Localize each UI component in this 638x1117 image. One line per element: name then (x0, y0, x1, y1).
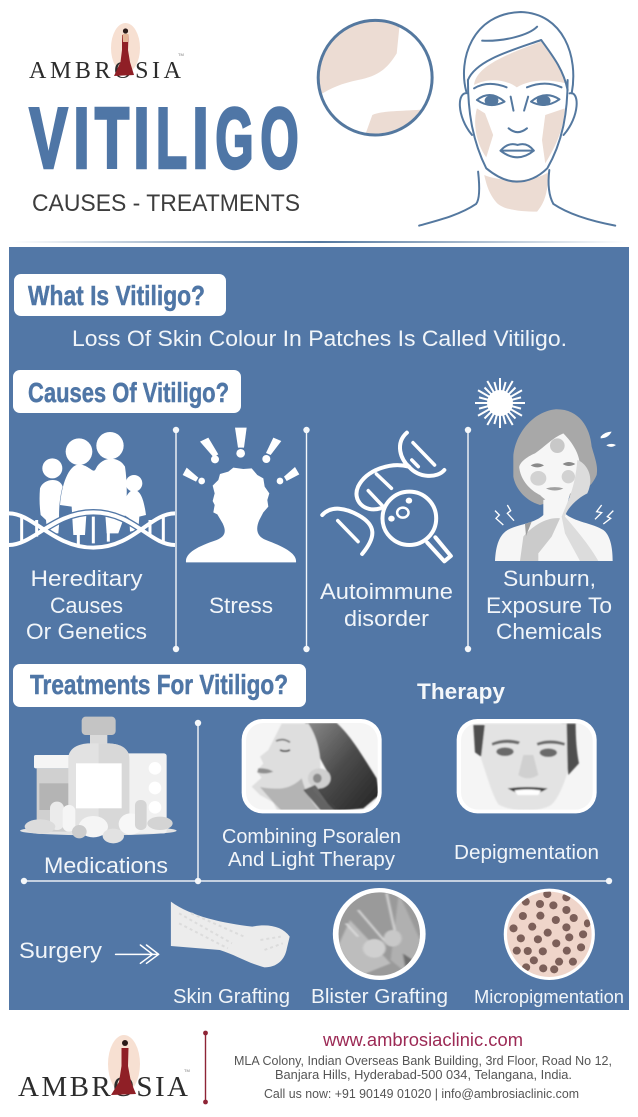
image: skin graft arm (171, 902, 290, 967)
main panel (9, 247, 629, 1010)
logo: Ambrosia footer: TM (184, 1068, 190, 1073)
heading: what is vitiligo (14, 274, 226, 316)
labels: causes (26, 566, 612, 644)
icon: stressed head (183, 428, 299, 562)
title: O (260, 92, 298, 186)
heading: causes: Causes Of Vitiligo? (28, 377, 229, 408)
labels: causes: disorder (344, 606, 429, 631)
labels: surgery options (173, 986, 624, 1008)
illustration: face with vitiligo patches (419, 12, 615, 226)
photo: depigmentation (457, 719, 597, 813)
subtitle: CAUSES - TREATMENTS (32, 190, 300, 217)
labels: causes: Sunburn, (503, 566, 596, 591)
cause dividers (173, 427, 471, 652)
label: medications: Medications (44, 853, 168, 878)
heading: causes (13, 370, 241, 413)
labels: causes: Exposure To (486, 593, 612, 618)
labels: causes: Hereditary (30, 566, 142, 591)
image: micropigmentation (504, 889, 595, 980)
logo: Ambrosia footer (18, 1035, 190, 1103)
icon: family and DNA (9, 432, 175, 548)
labels: causes: Chemicals (496, 619, 602, 644)
divider (12, 241, 627, 243)
title: I (74, 92, 90, 186)
labels: therapy options: Depigmentation (454, 842, 599, 864)
title: T (95, 92, 129, 186)
address and contact: Banjara Hills, Hyderabad-500 034, Telangana, India. (275, 1068, 572, 1082)
title: I (134, 92, 150, 186)
logo: Ambrosia header (29, 23, 184, 84)
title: G (216, 92, 254, 186)
labels: causes: Stress (209, 593, 273, 618)
labels: surgery options: Blister Grafting (311, 986, 448, 1008)
heading: treatments (13, 664, 306, 707)
logo: Ambrosia header: TM (178, 52, 184, 57)
labels: therapy options: Combining Psoralen (222, 826, 401, 848)
treatment dividers (21, 720, 612, 884)
address and contact: Call us now: +91 90149 01020 | info@ambrosiaclinic.com (264, 1087, 579, 1101)
labels: causes: Causes (50, 593, 123, 618)
address and contact (234, 1054, 612, 1101)
logo: Ambrosia header: AMBROSIA (29, 58, 182, 84)
heading: therapy: Therapy (417, 679, 506, 704)
labels: causes: Or Genetics (26, 619, 147, 644)
label: surgery: Surgery (19, 938, 102, 963)
heading: what is vitiligo: What Is Vitiligo? (28, 280, 205, 311)
arrow: surgery (116, 945, 159, 963)
illustration: skin close-up circle (316, 18, 434, 136)
icon: sun (475, 378, 525, 428)
labels: therapy options: And Light Therapy (228, 849, 395, 871)
labels: causes: Autoimmune (320, 579, 453, 604)
icon: sunburnt woman (495, 409, 616, 561)
footer divider (203, 1031, 208, 1104)
labels: surgery options: Micropigmentation (474, 987, 624, 1007)
icon: medications (20, 717, 177, 843)
title: L (156, 92, 187, 186)
definition text: Loss Of Skin Colour In Patches Is Called Vitiligo. (72, 326, 567, 351)
labels: therapy options (222, 826, 599, 871)
address and contact: MLA Colony, Indian Overseas Bank Building, 3rd Floor, Road No 12, (234, 1054, 612, 1068)
title: I (192, 92, 208, 186)
labels: surgery options: Skin Grafting (173, 986, 290, 1008)
image: blister grafting (333, 888, 426, 980)
icon: DNA with magnifier (322, 433, 451, 561)
logo: Ambrosia footer: AMBROSIA (18, 1071, 188, 1103)
heading: treatments: Treatments For Vitiligo? (30, 669, 288, 700)
title: V (30, 92, 68, 186)
photo: psoralen and light therapy (242, 719, 382, 813)
website: www.ambrosiaclinic.com (322, 1030, 523, 1050)
